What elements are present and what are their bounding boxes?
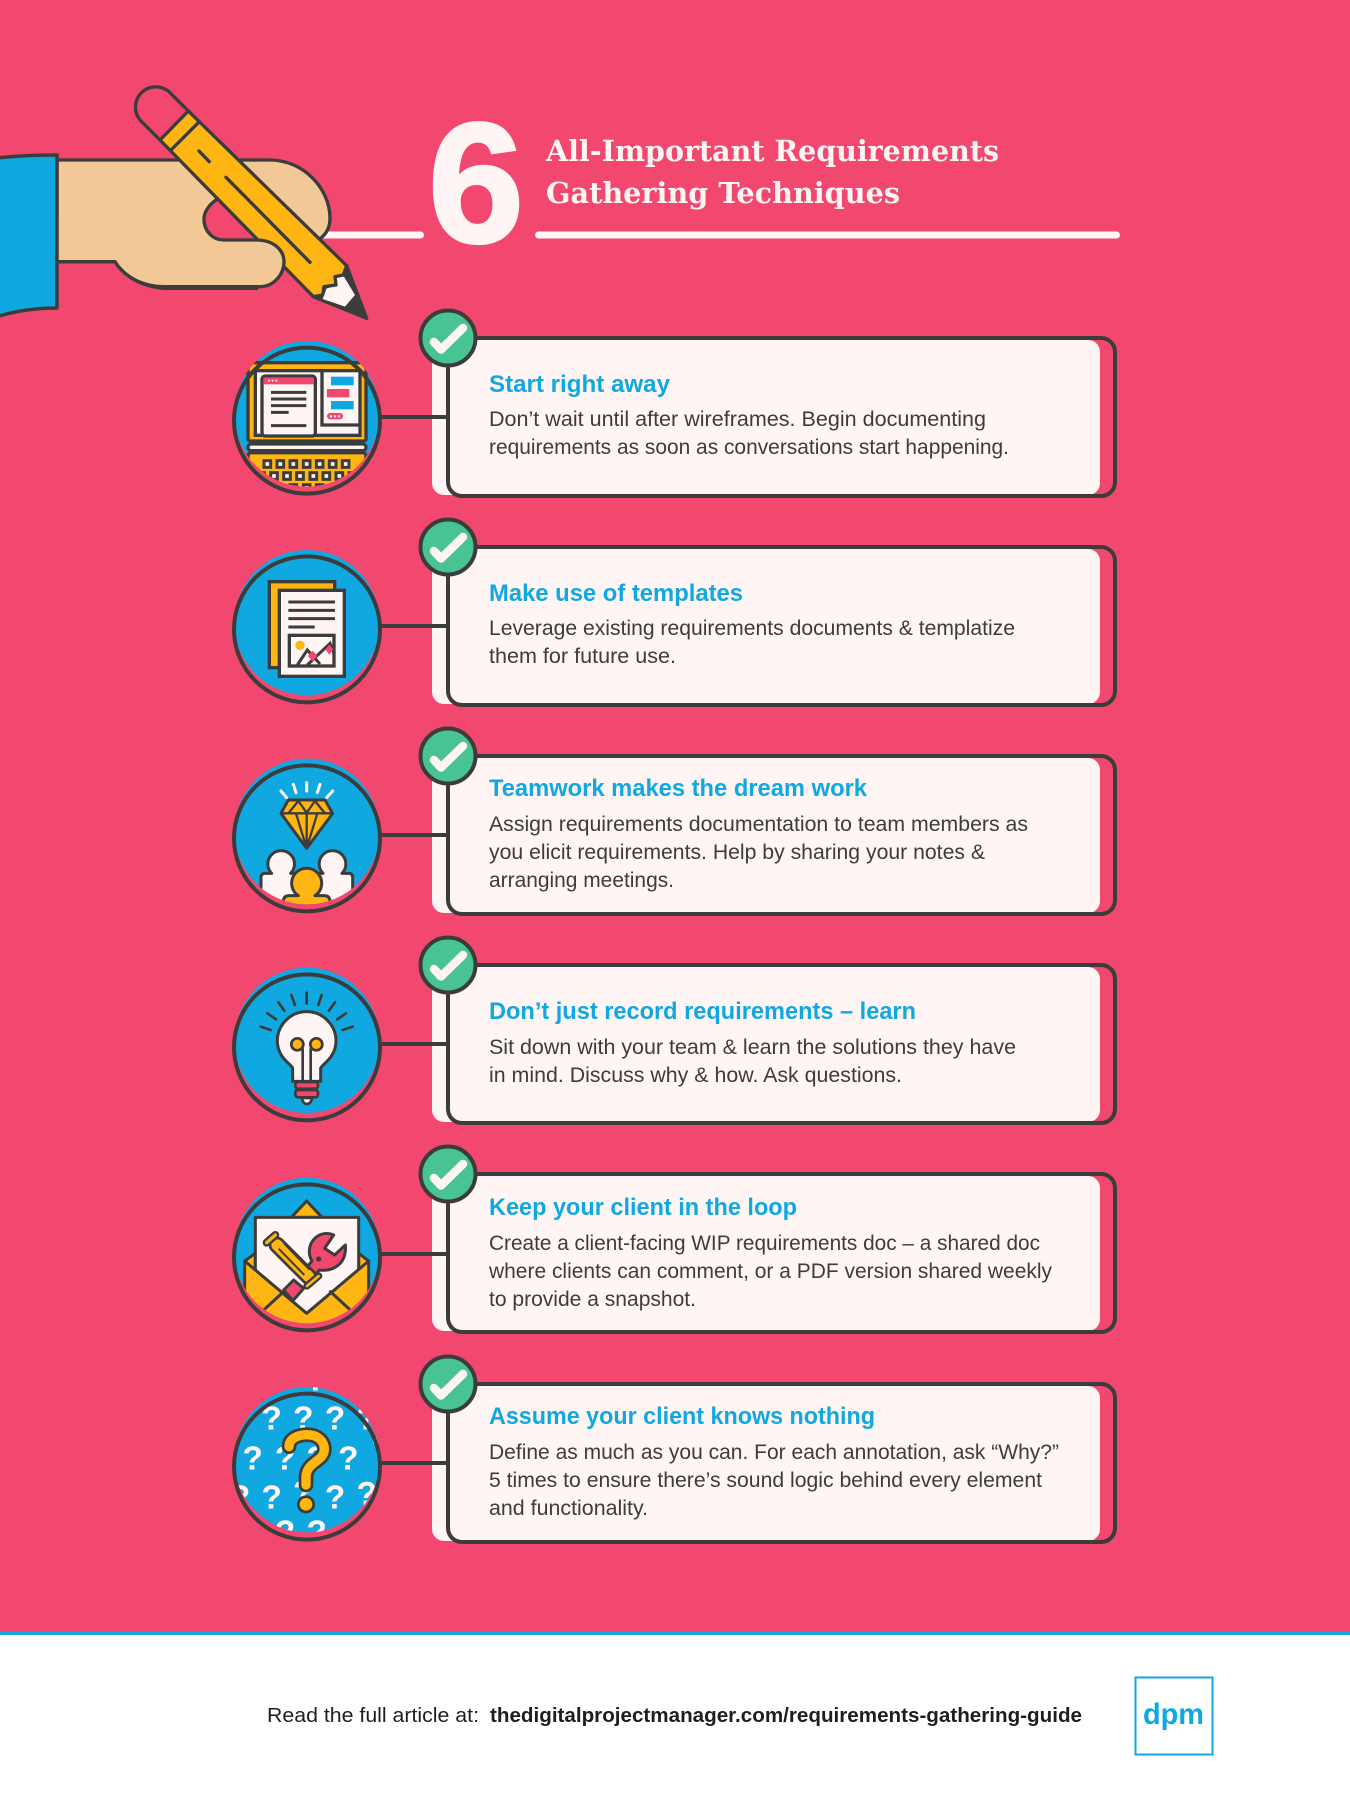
panel: step 1: [234, 310, 1115, 503]
icon: question marks: ?: [325, 1400, 345, 1437]
body text: to provide a snapshot.: [489, 1288, 696, 1311]
title: Gathering Techniques: [546, 176, 900, 210]
icon: question marks: ?: [293, 1474, 314, 1511]
gap between thumb and pencil: [204, 199, 263, 240]
icon: question marks: ?: [325, 1479, 345, 1516]
illustration: hand holding pencil: [0, 87, 367, 318]
footer text: Read the full article at:: [267, 1705, 479, 1727]
body text: [489, 408, 1009, 459]
footer: [0, 1631, 1350, 1800]
icon: question marks: ?: [306, 1440, 327, 1477]
icon: documents: [234, 550, 380, 702]
pencil wood: [323, 276, 355, 307]
thumb: [57, 199, 284, 287]
card: [432, 1384, 1115, 1542]
check badge: [420, 1146, 476, 1202]
connector: [380, 1252, 448, 1256]
icon: question marks: ?: [306, 1362, 326, 1399]
icon: question marks: [232, 1386, 382, 1542]
check badge: [420, 938, 476, 992]
icon: question marks: ?: [356, 1476, 377, 1513]
footer text: thedigitalprojectmanager.com/requirements-gathering-guide: [490, 1705, 1082, 1727]
panel: step 5: [234, 1146, 1115, 1347]
connector: [380, 1461, 448, 1465]
header rule left: [320, 232, 424, 238]
body text: you elicit requirements. Help by sharing your notes &: [489, 841, 985, 864]
body text: [489, 617, 1015, 668]
heading: Keep your client in the loop: [489, 1194, 797, 1221]
body text: Assign requirements documentation to team members as: [489, 813, 1028, 836]
heading: Start right away: [489, 371, 671, 398]
icon: question marks: ?: [356, 1400, 377, 1437]
pencil details: [171, 122, 310, 262]
body text: in mind. Discuss why & how. Ask questions.: [489, 1064, 902, 1087]
body text: [489, 813, 1028, 892]
icon: question marks: ?: [275, 1440, 295, 1477]
body text: Leverage existing requirements documents & templatize: [489, 617, 1015, 640]
icon: question marks: ?: [230, 1479, 250, 1516]
title: All-Important Requirements: [545, 134, 999, 168]
hand and pencil artwork: [57, 87, 367, 318]
icon: question marks: ?: [261, 1479, 282, 1516]
heading: Make use of templates: [489, 580, 743, 607]
logo: dpm: dpm: [1143, 1698, 1204, 1731]
check badge: [420, 728, 476, 784]
connector: [380, 624, 448, 628]
icon: question marks: ?: [275, 1514, 295, 1551]
body text: where clients can comment, or a PDF version shared weekly: [488, 1260, 1052, 1283]
body text: [489, 1036, 1016, 1087]
card: [432, 965, 1115, 1123]
big number 6: 6: [428, 88, 524, 279]
body text: Don’t wait until after wireframes. Begin documenting: [489, 408, 986, 431]
card: [432, 756, 1115, 914]
pencil eraser: [135, 87, 188, 140]
icon: laptop: [234, 341, 380, 503]
heading: Assume your client knows nothing: [489, 1403, 875, 1430]
card: [432, 338, 1115, 496]
heading: Don’t just record requirements – learn: [489, 998, 916, 1025]
icon: question marks: ?: [371, 1430, 392, 1467]
body text: them for future use.: [489, 645, 676, 668]
body text: arranging meetings.: [489, 869, 674, 892]
icon: question marks: ?: [242, 1440, 263, 1477]
hand: [57, 160, 330, 288]
check badge: [420, 1356, 476, 1412]
icon: light bulb: [234, 968, 380, 1120]
body text: [488, 1232, 1052, 1311]
title: [545, 134, 999, 210]
logo: dpm: [1136, 1678, 1212, 1754]
body text: and functionality.: [489, 1497, 648, 1520]
card: [432, 1174, 1115, 1332]
body text: Sit down with your team & learn the solutions they have: [489, 1036, 1016, 1059]
panel: step 6: [230, 1356, 1115, 1551]
body text: Define as much as you can. For each annotation, ask “Why?”: [489, 1441, 1059, 1464]
sleeve: [0, 155, 57, 317]
icon: question marks: ?: [293, 1400, 314, 1437]
icon: question marks: ?: [306, 1514, 327, 1551]
check badge: [420, 520, 476, 574]
body text: 5 times to ensure there’s sound logic behind every element: [489, 1469, 1042, 1492]
connector: [380, 415, 448, 419]
panel: step 3: [234, 728, 1115, 914]
card: [432, 547, 1115, 705]
icon: question marks: ?: [261, 1400, 282, 1437]
pencil body: [160, 111, 347, 297]
icon: question marks: ?: [338, 1440, 359, 1477]
icon: team and diamond: [234, 759, 380, 911]
connector: [380, 1042, 448, 1046]
pencil tip: [313, 266, 367, 318]
heading: Teamwork makes the dream work: [489, 775, 868, 802]
body text: [489, 1441, 1059, 1520]
panel: step 2: [234, 520, 1115, 705]
icon: envelope with tools: [234, 1178, 380, 1347]
header rule right: [535, 232, 1120, 238]
connector: [380, 833, 448, 837]
panel: step 4: [234, 938, 1115, 1123]
body text: requirements as soon as conversations start happening.: [489, 436, 1009, 459]
check badge: [420, 310, 476, 366]
body text: Create a client-facing WIP requirements doc – a shared doc: [489, 1232, 1040, 1255]
